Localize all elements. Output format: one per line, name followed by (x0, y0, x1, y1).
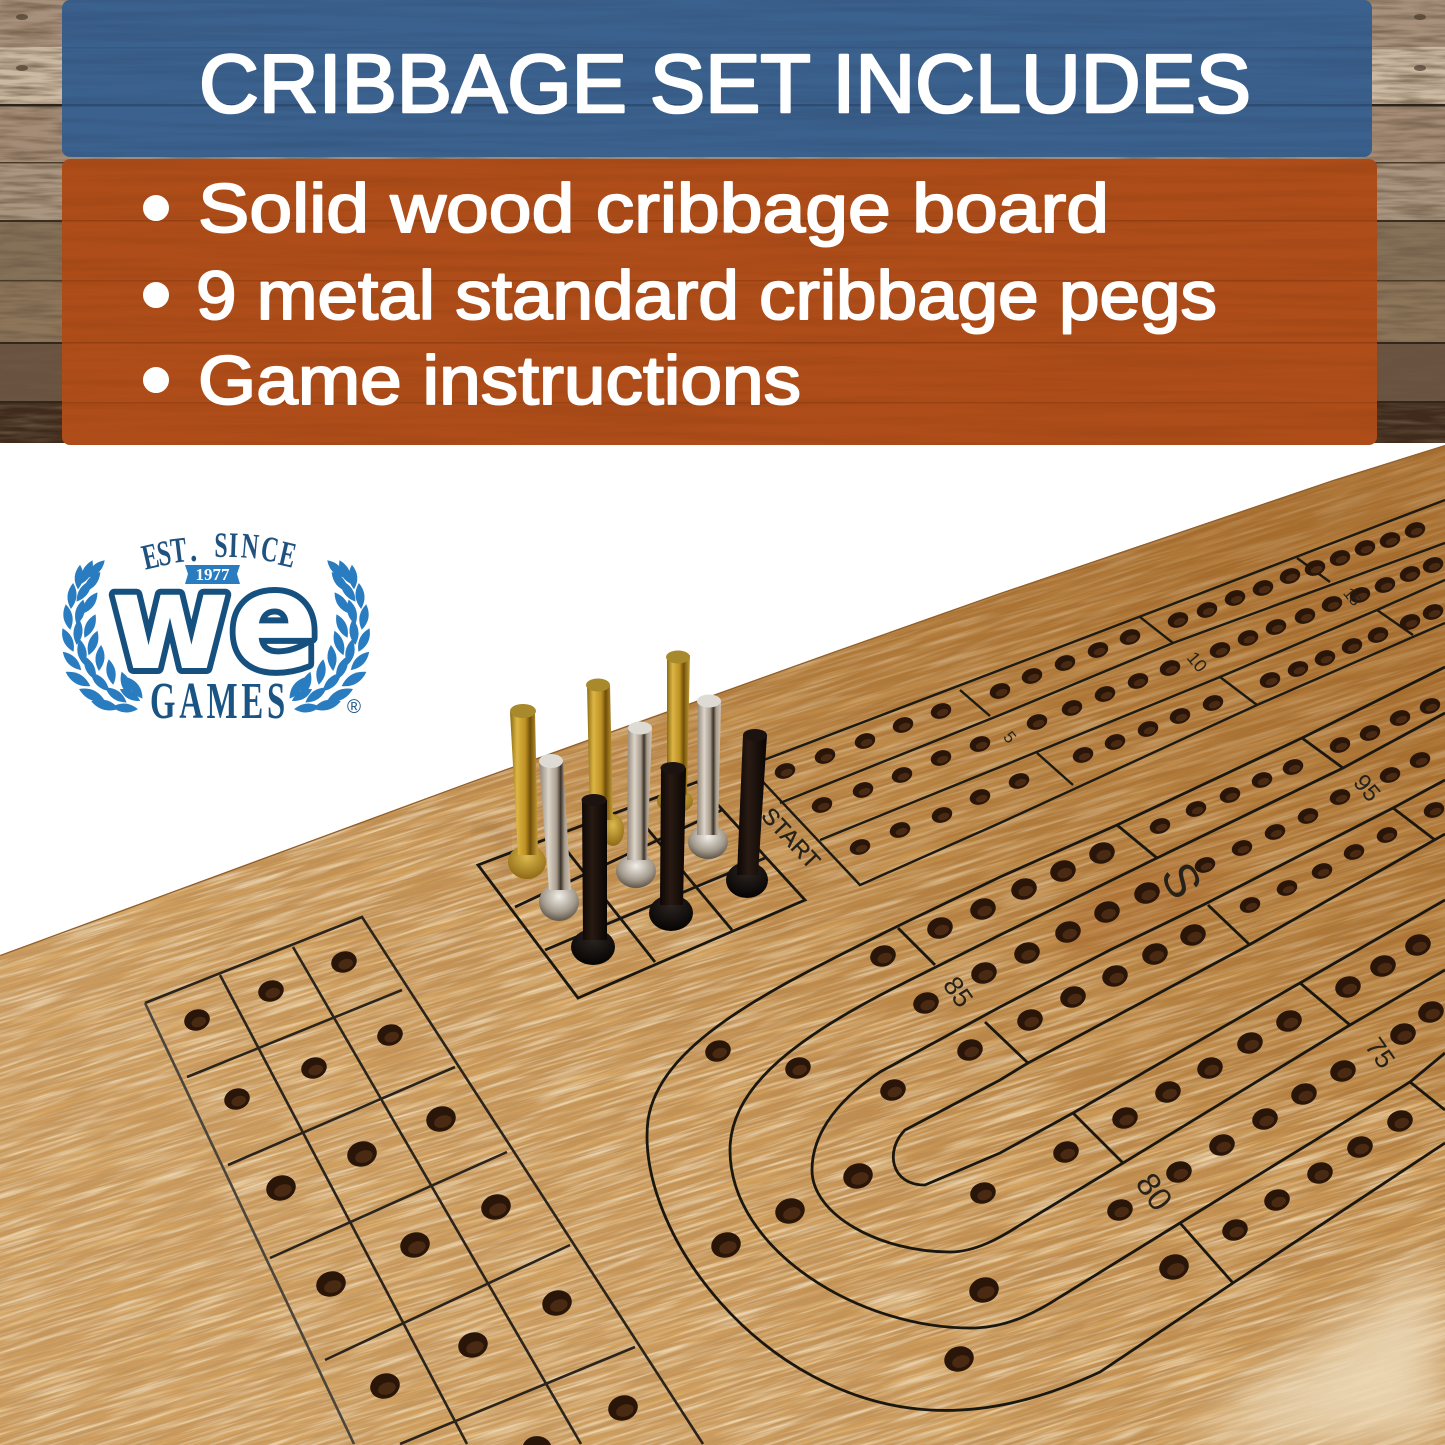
logo: WE Games (58, 525, 374, 730)
board printed labels: 10 (1183, 648, 1211, 676)
track lines: upper start section (748, 500, 1445, 885)
track peg holes: start section (773, 520, 1445, 857)
board printed labels: 15 (1339, 585, 1364, 610)
pegs: black (571, 729, 768, 965)
logo laurel right (286, 557, 374, 714)
panel: orange contents band (62, 159, 1377, 445)
board printed labels: START (757, 802, 825, 874)
cribbage board wood (0, 445, 1445, 1445)
logo text: est since (138, 525, 300, 578)
board printed labels: 80 (1129, 1166, 1180, 1217)
logo text: est since: I (228, 525, 239, 565)
track peg holes: curve and lower section (702, 931, 1445, 1376)
logo laurel left (58, 557, 146, 714)
registered mark: ® (347, 697, 361, 718)
board printed labels: 95 (1348, 769, 1386, 807)
board printed labels: S (1150, 854, 1212, 907)
logo text: est since: N (240, 526, 260, 567)
left discard grid lines (145, 917, 703, 1444)
bullet list: Solid wood cribbage board (198, 170, 1109, 247)
bullet list: Game instructions (198, 342, 801, 419)
pegs: gold (508, 650, 693, 879)
logo text: est since: . (188, 530, 198, 570)
panel: blue title band (62, 0, 1372, 157)
board printed labels: 5 (999, 728, 1020, 747)
logo text: est since: E (138, 535, 163, 578)
title: CRIBBAGE SET INCLUDES (199, 37, 1251, 130)
logo text: est since: S (214, 525, 228, 565)
logo banner: 1977: 1977 (196, 565, 230, 584)
logo text: est since: C (258, 528, 281, 571)
track peg holes: middle section (867, 696, 1445, 1064)
logo text: est since: T (168, 529, 189, 571)
track lines: U-shaped loop (647, 667, 1445, 1410)
peg starting grid (478, 782, 805, 998)
left grid peg holes (181, 948, 641, 1445)
logo banner: 1977 (185, 565, 240, 584)
board printed labels: 85 (937, 971, 979, 1013)
bullet list: 9 metal standard cribbage pegs (196, 257, 1217, 334)
pegs: silver (539, 694, 728, 921)
logo wordmark: we: we (110, 544, 318, 700)
logo text: games: GAMES (150, 673, 289, 730)
wood plank backdrop (0, 0, 1445, 443)
board printed labels: 75 (1359, 1032, 1401, 1074)
bullet list (144, 170, 1217, 419)
logo text: est since: S (154, 532, 174, 574)
board printed labels (757, 585, 1401, 1217)
logo text: est since: E (275, 533, 300, 576)
